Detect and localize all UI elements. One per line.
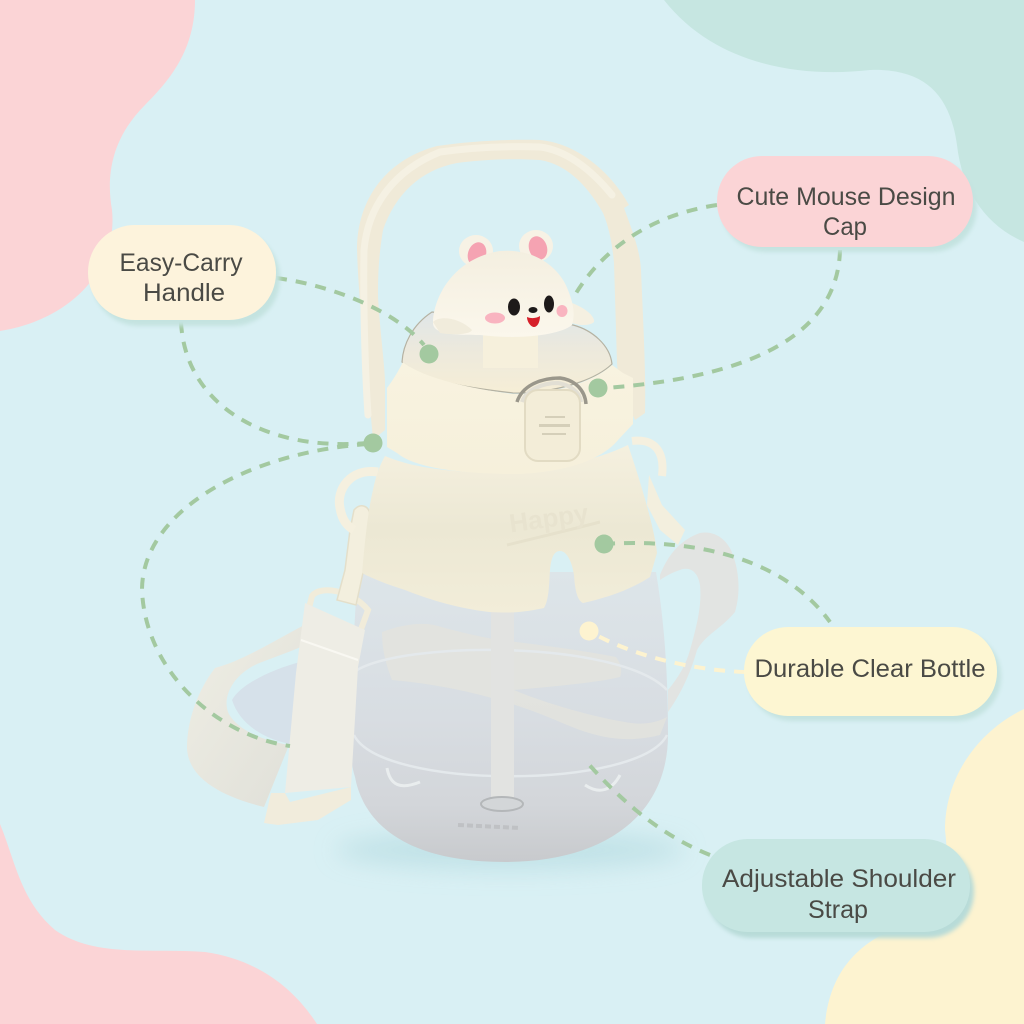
right carabiner [647, 475, 685, 545]
straw [491, 605, 514, 810]
connector: band dot to shoulder strap [142, 444, 368, 746]
callout: Easy-Carry Handle: Easy-Carry [120, 249, 243, 277]
callout: Durable Clear Bottle [744, 627, 1001, 721]
callout: Cute Mouse Design Cap: Cap [823, 213, 867, 241]
collar emboss text: Happy [507, 498, 591, 538]
strap tab stitch [301, 640, 358, 660]
cap stem [483, 334, 538, 368]
connector: cap callout to lid dot [605, 250, 840, 388]
strap back loop right [660, 532, 739, 712]
left ear [459, 235, 493, 267]
decorative blob: top right teal [664, 0, 1024, 242]
callout: Durable Clear Bottle: Durable Clear Bottle [754, 655, 986, 683]
eyes [508, 298, 520, 316]
strap left loop [187, 622, 310, 807]
decorative blob: top left pink [0, 0, 195, 331]
dot: handle [420, 344, 438, 364]
straw base ring [481, 797, 523, 811]
callout: Adjustable Shoulder Strap: Adjustable Shoulder [722, 865, 956, 893]
cap band [387, 362, 633, 474]
button hinge arc [517, 378, 586, 404]
strap loop interior [232, 662, 300, 745]
dot: collar [594, 534, 614, 554]
connector: cap callout to mouse [572, 205, 717, 300]
connector: collar dot to bottle callout [604, 543, 830, 622]
left carabiner [337, 506, 370, 605]
right ear [519, 230, 553, 262]
decorative blob: bottom right yellow [825, 709, 1024, 1024]
bottle body [351, 572, 668, 862]
collar [362, 445, 657, 613]
callout: Easy-Carry Handle: Handle [143, 279, 225, 307]
right arm [570, 303, 594, 325]
connector: bottle callout to body dot [589, 631, 745, 672]
callout: Adjustable Shoulder Strap [702, 839, 974, 938]
dot: band [364, 434, 382, 452]
bottle shadow [335, 830, 685, 870]
strap buckle [264, 787, 351, 825]
mouth [527, 316, 540, 327]
left arm [433, 318, 472, 334]
decorative blob: bottom left pink [0, 824, 317, 1024]
callout: Cute Mouse Design Cap: Cute Mouse Design [736, 183, 956, 211]
embossed logo on collar [507, 522, 600, 545]
callout: Easy-Carry Handle [88, 225, 280, 326]
strap tab ring [308, 590, 368, 632]
right ring [632, 441, 663, 476]
flip button [525, 390, 580, 461]
dot: clear body [580, 622, 598, 640]
clear dome [402, 312, 612, 393]
left ring [339, 472, 378, 530]
cheeks [485, 312, 505, 324]
connector: handle callout to band dot [181, 322, 368, 444]
strap tab [285, 603, 365, 793]
mouse cap [433, 230, 594, 337]
bottle ridges [354, 650, 667, 776]
bottle highlights [387, 768, 620, 790]
bottom emboss [458, 825, 520, 828]
dot: lid [588, 378, 608, 398]
nose [528, 307, 538, 313]
handle [357, 140, 645, 440]
product: water bottle [187, 140, 739, 870]
handle highlight [364, 147, 612, 415]
connector: strap callout to bottle base [585, 760, 710, 855]
strap seen through bottle [382, 624, 667, 739]
callout: Cute Mouse Design Cap [717, 156, 977, 252]
head [433, 251, 574, 337]
button hinge arc highlight [522, 383, 581, 402]
callout: Adjustable Shoulder Strap: Strap [808, 896, 868, 924]
connector: handle callout to handle dot [276, 278, 424, 345]
